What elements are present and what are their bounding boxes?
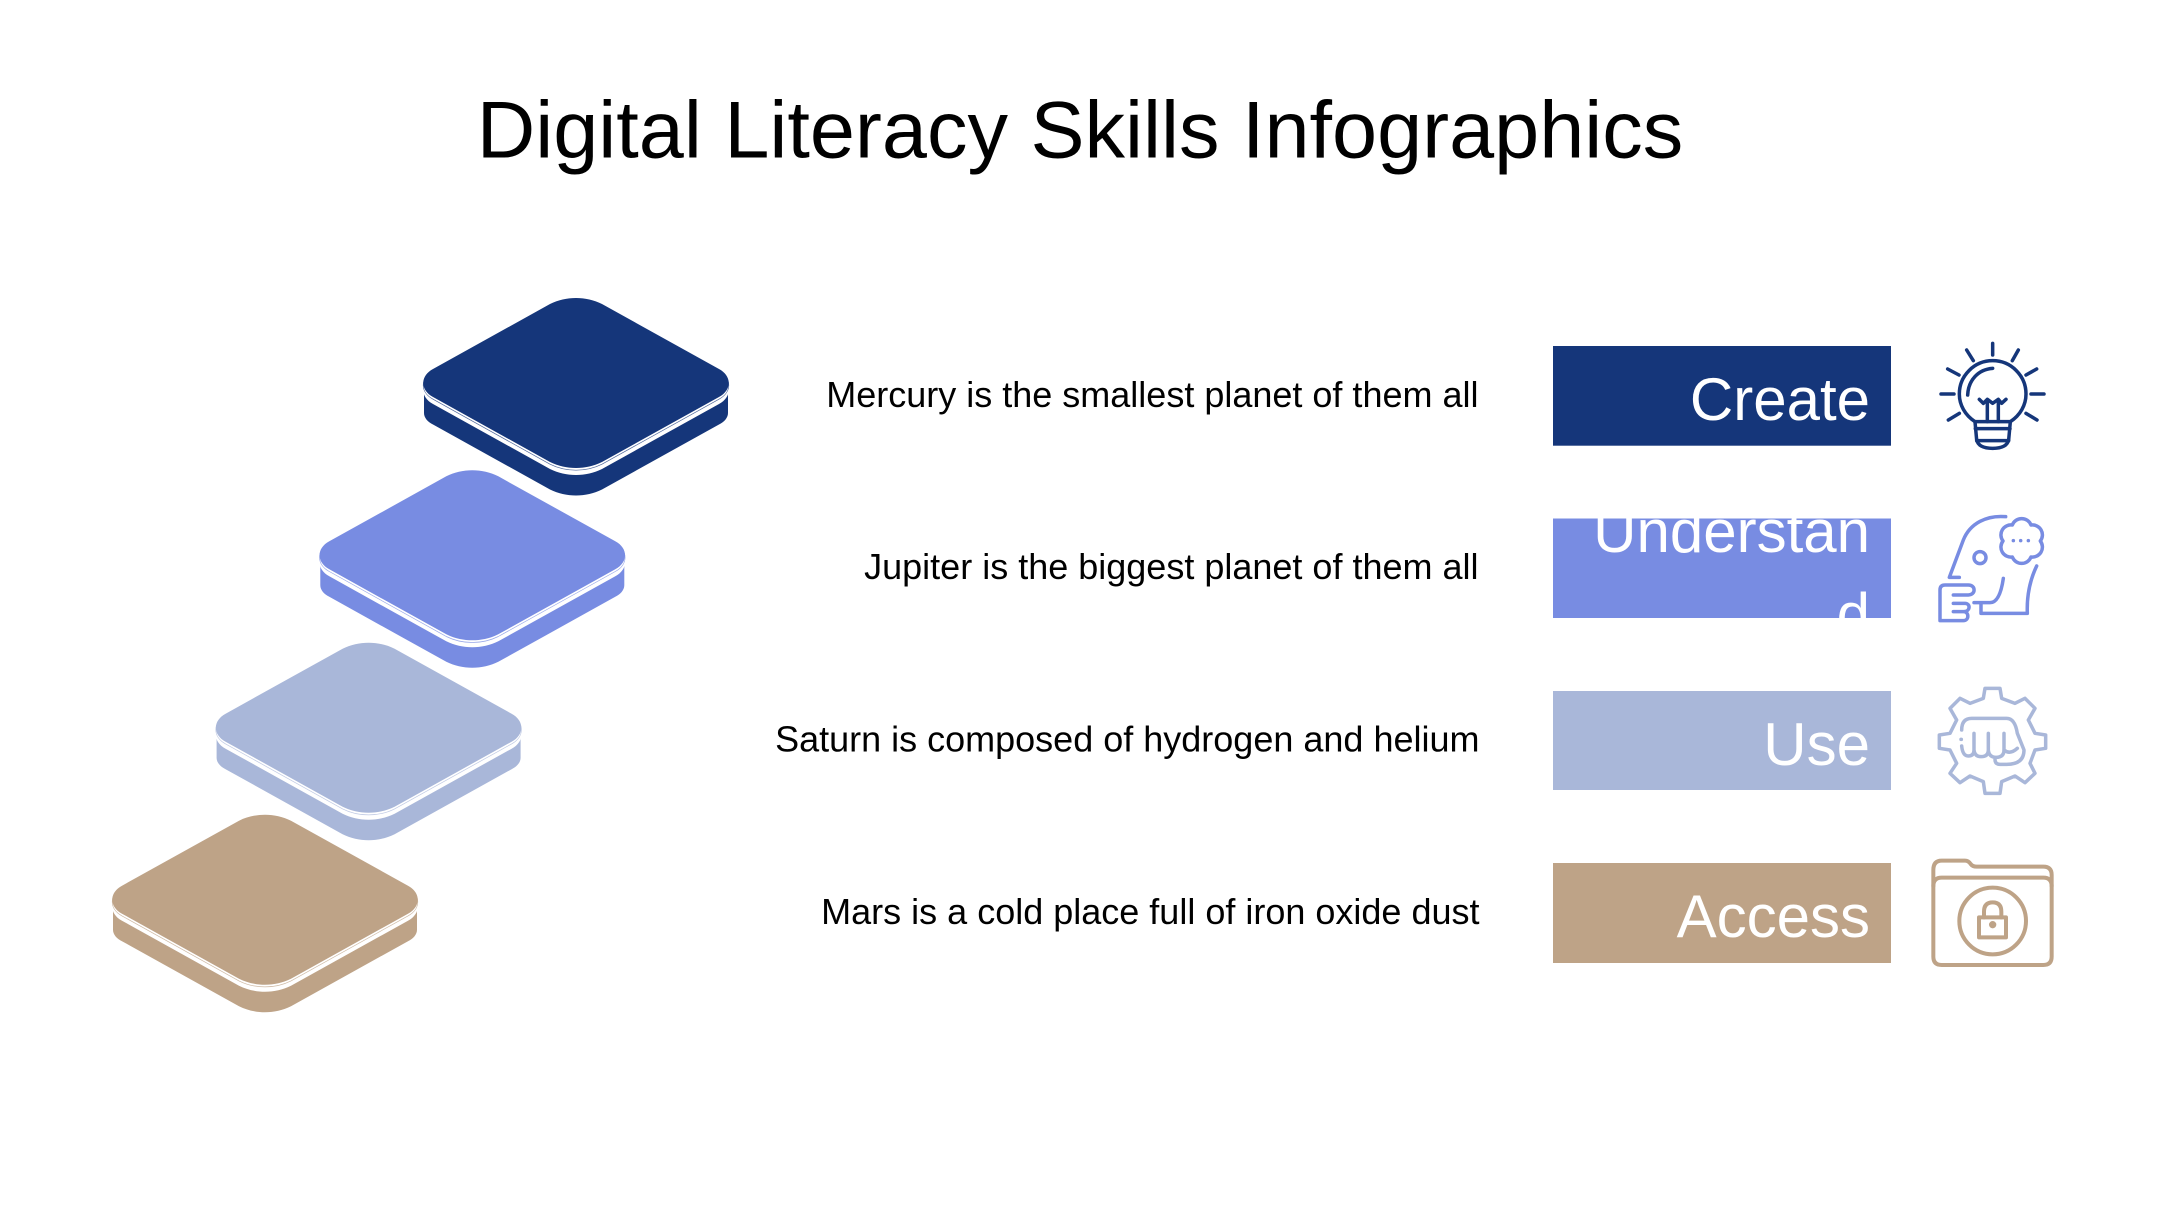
label bar: use [1553,691,1891,790]
icon: locked folder [1933,861,2052,965]
label bar: access: Access [1677,883,1870,950]
label bar: create: Create [1690,366,1870,433]
icon: light bulb [1941,343,2044,448]
isometric tile stack [112,298,729,1012]
tile: access [112,815,418,1012]
label bar: create [1553,346,1891,446]
tile: create [423,298,729,496]
title: Digital Literacy Skills Infographics [477,86,1683,176]
icon: gear with fist [1939,688,2046,793]
description: mars: Mars is a cold place full of iron oxide dust [821,891,1480,932]
label bar: understand: Understan [1593,498,1870,565]
label bar: understand: d [1837,581,1870,648]
icon: head with thought cloud [1940,516,2042,621]
description: mercury: Mercury is the smallest planet of them all [826,374,1478,415]
tile: understand [320,470,625,668]
label bar: access [1553,863,1891,963]
description: saturn: Saturn is composed of hydrogen and helium [775,718,1480,760]
tile: use [216,643,521,840]
label bar: understand [1553,518,1891,618]
label bar: use: Use [1763,711,1870,778]
description: jupiter: Jupiter is the biggest planet of them all [864,546,1478,587]
